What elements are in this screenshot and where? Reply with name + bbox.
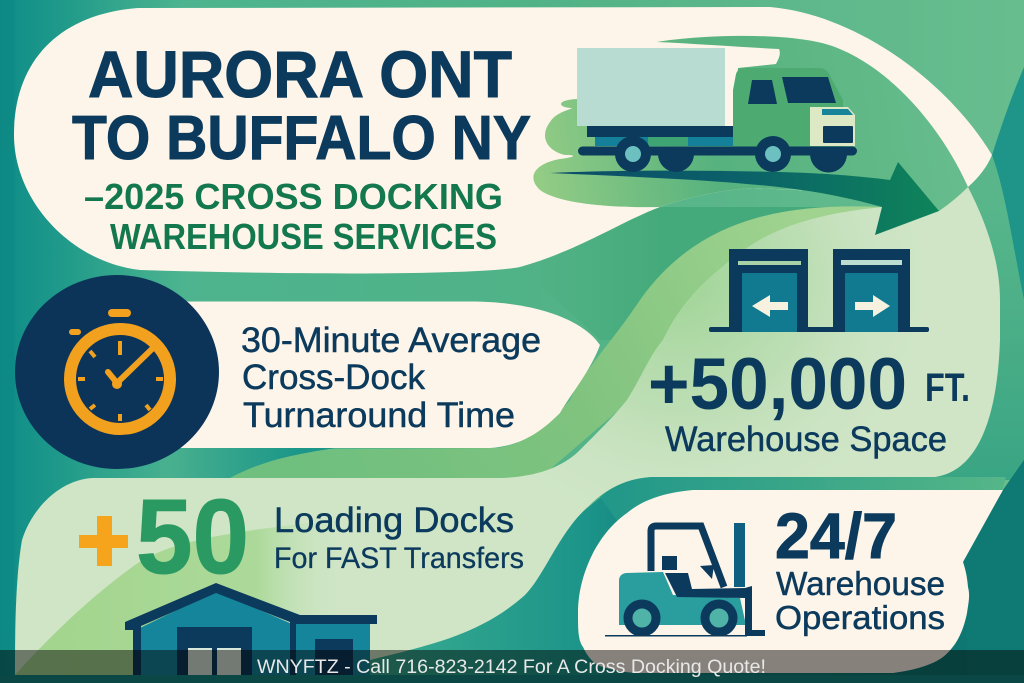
- lower left green wedge: [15, 520, 340, 675]
- label line 2: For FAST Transfers: [274, 542, 524, 575]
- stat label: Warehouse Space: [665, 420, 947, 459]
- label line 1: Loading Docks: [274, 501, 514, 540]
- operations text: [775, 500, 945, 636]
- number 50: 50: [136, 478, 249, 596]
- panel: operations: [578, 490, 1003, 673]
- subheading line 2: WAREHOUSE SERVICES: [110, 216, 497, 257]
- loading docks stat: [79, 478, 524, 596]
- text line 1: 30-Minute Average: [241, 321, 541, 360]
- cream title blob: [14, 7, 992, 273]
- band above forklift panel: [600, 477, 1006, 525]
- icon: orange plus: [79, 516, 128, 566]
- bottom teal field: [370, 460, 1024, 683]
- footer text: WNYFTZ - Call 716-823-2142 For A Cross Docking Quote!: [257, 656, 766, 678]
- label line 2: Operations: [775, 599, 945, 636]
- panel: title: [14, 7, 992, 273]
- text line 3: Turnaround Time: [243, 396, 515, 435]
- panel: warehouse space and loading docks background: [15, 187, 1000, 675]
- heading line 2: TO BUFFALO NY: [72, 104, 531, 173]
- subheading line 1: –2025 CROSS DOCKING: [84, 176, 503, 217]
- dark teal right corner: [963, 460, 1024, 683]
- icon: warehouse building: [125, 583, 377, 675]
- text line 2: Cross-Dock: [242, 358, 425, 397]
- label line 1: Warehouse: [776, 565, 945, 602]
- footer bar: [0, 650, 1024, 683]
- pale panel green tint: [500, 187, 1000, 505]
- icon: stopwatch: [15, 275, 219, 469]
- icon: dock doors: [709, 249, 929, 332]
- panel: turnaround: [120, 302, 600, 448]
- heading line 1: AURORA ONT: [88, 37, 512, 111]
- stat unit: FT.: [925, 366, 970, 410]
- light green stripe: [230, 206, 883, 478]
- warehouse space stat: [648, 344, 970, 459]
- turnaround text: [241, 321, 541, 435]
- green swoosh behind truck: [533, 36, 968, 211]
- icon: forklift: [605, 523, 765, 636]
- icon: truck: [577, 48, 857, 172]
- arrow: [550, 162, 939, 235]
- stat number: +50,000: [648, 344, 907, 425]
- 24/7: 24/7: [775, 500, 897, 572]
